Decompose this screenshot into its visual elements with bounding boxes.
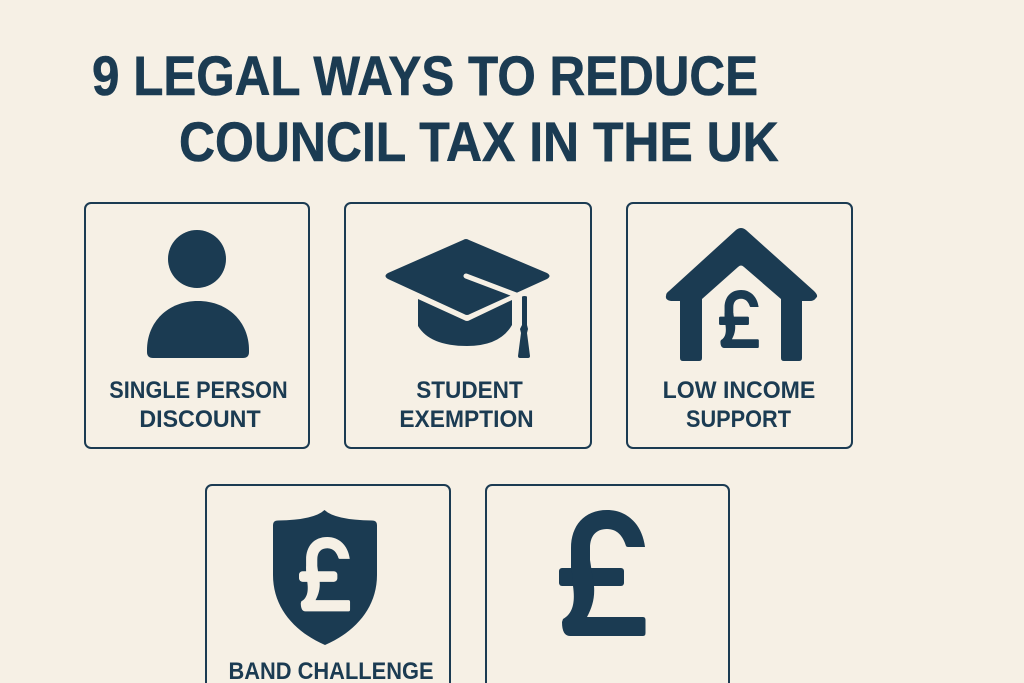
label: single person discount: DISCOUNT	[139, 406, 261, 433]
label: single person discount: SINGLE PERSON	[109, 377, 288, 404]
title line 1: 9 LEGAL WAYS TO REDUCE	[92, 44, 758, 107]
label: low income support	[663, 377, 815, 433]
label: student exemption: STUDENT	[416, 377, 523, 404]
label: student exemption	[399, 377, 534, 433]
panel: pound	[485, 484, 730, 683]
label: student exemption: EXEMPTION	[399, 406, 534, 433]
label: single person discount	[109, 377, 288, 433]
panel: low income support	[626, 202, 853, 449]
panel: band challenge	[205, 484, 451, 683]
panel: single person discount	[84, 202, 310, 449]
label: low income support: LOW INCOME	[663, 377, 815, 404]
panel: student exemption	[344, 202, 592, 449]
title line 2: COUNCIL TAX IN THE UK	[179, 110, 779, 173]
label: low income support: SUPPORT	[686, 406, 791, 433]
